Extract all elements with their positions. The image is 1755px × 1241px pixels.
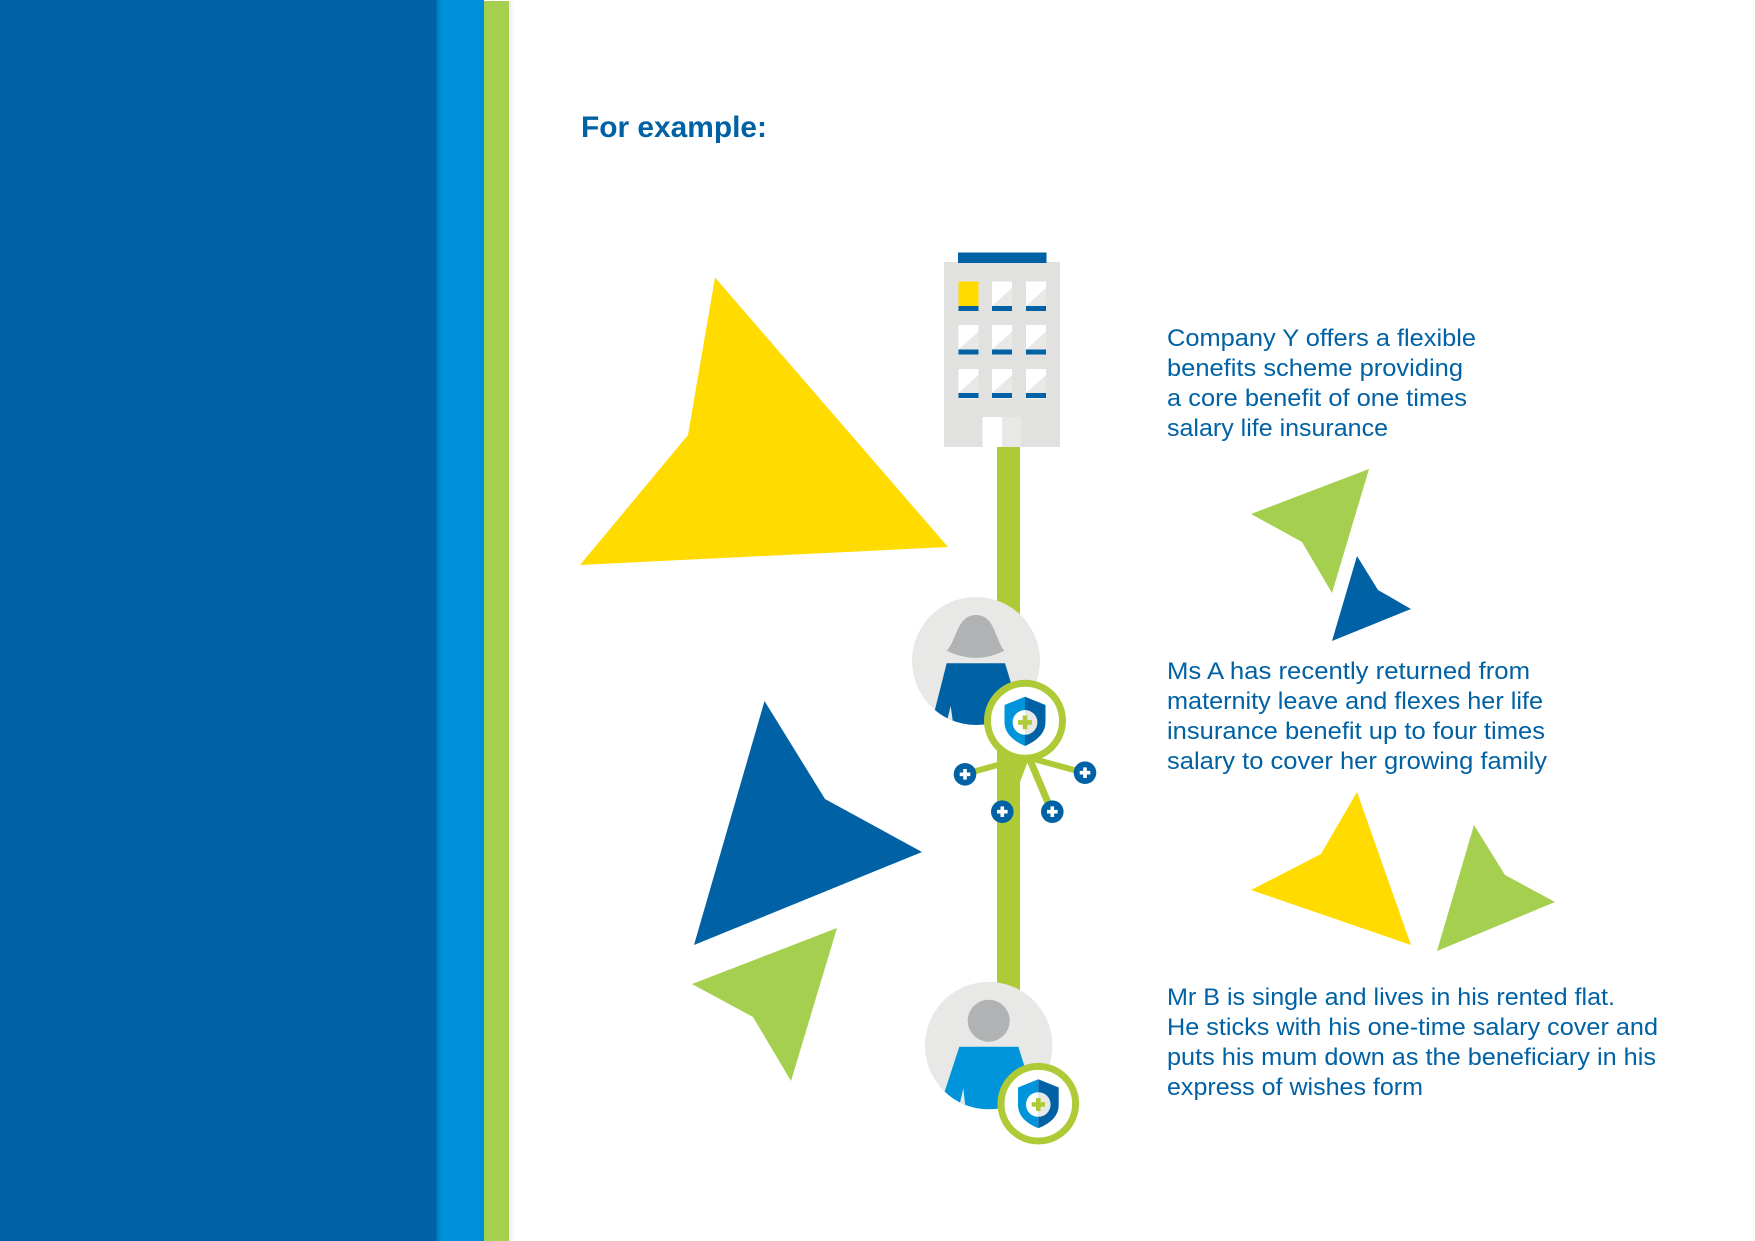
text: Ms A: insurance benefit up to four times (1167, 718, 1545, 745)
decorative arrow: large dark blue (694, 701, 922, 945)
text: Mr B: express of wishes form (1167, 1074, 1423, 1101)
icon: shield badge B (1001, 1066, 1076, 1141)
icon: office building (944, 252, 1060, 447)
text: company Y: benefits scheme providing (1167, 355, 1463, 382)
text: company Y: a core benefit of one times (1167, 385, 1467, 412)
text: Ms A (1167, 658, 1547, 775)
text: Mr B: Mr B is single and lives in his rented flat. (1167, 984, 1615, 1011)
icon: person B (man) (925, 982, 1052, 1115)
connector stem (997, 447, 1020, 1007)
decorative arrow: upper right green (1251, 469, 1369, 593)
decorative arrow: right green (1437, 825, 1555, 951)
icon: shield badge A (988, 683, 1062, 758)
text: Mr B: He sticks with his one-time salary cover and (1167, 1014, 1658, 1041)
icon: benefit plus dot, lower right (1041, 800, 1064, 823)
text: Mr B (1167, 984, 1658, 1101)
decorative arrow: large yellow (580, 278, 948, 565)
decorative arrow: small dark blue (1332, 556, 1411, 641)
decorative arrow: lower green (692, 928, 837, 1081)
heading: For example: (581, 111, 767, 144)
panel: left colour bands (0, 0, 515, 1241)
text: Mr B: puts his mum down as the beneficiary in his (1167, 1044, 1656, 1071)
text: company Y: salary life insurance (1167, 415, 1388, 442)
icon: benefit plus dot, right (1074, 761, 1096, 784)
benefit branches (965, 758, 1085, 812)
text: Ms A: Ms A has recently returned from (1167, 658, 1530, 685)
icon: person A (woman) (912, 597, 1040, 725)
icon: benefit plus dot, left (954, 763, 976, 786)
decorative arrow: right yellow (1251, 792, 1411, 945)
text: company Y: Company Y offers a flexible (1167, 325, 1476, 352)
icon: benefit plus dot, lower left (991, 800, 1014, 823)
text: Ms A: salary to cover her growing family (1167, 748, 1547, 775)
text: company Y (1167, 325, 1476, 442)
text: Ms A: maternity leave and flexes her life (1167, 688, 1543, 715)
